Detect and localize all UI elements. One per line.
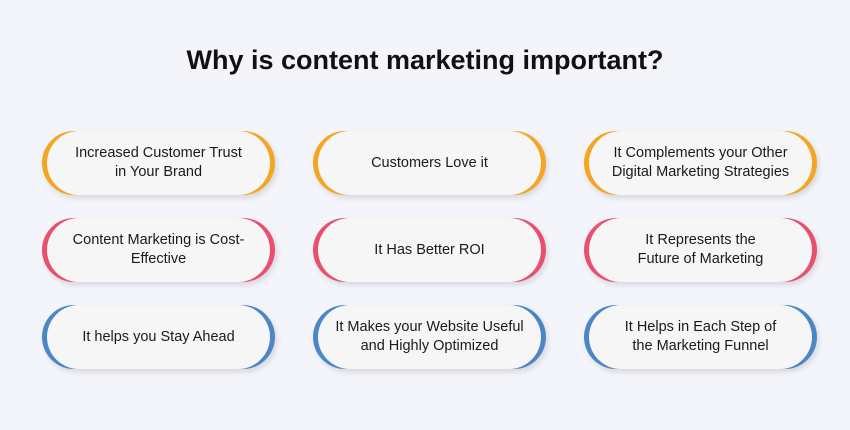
- pill: roi: It Has Better ROI: [374, 242, 485, 258]
- pill: love: [313, 131, 546, 195]
- pill: trust: [42, 131, 275, 195]
- pill: roi: [313, 218, 546, 282]
- pill: future: [584, 218, 817, 282]
- pill: cost: Effective: [131, 251, 186, 267]
- pill: website: It Makes your Website Useful: [335, 319, 524, 335]
- pill: love: Customers Love it: [371, 154, 488, 170]
- pill: future: It Represents the: [645, 232, 756, 248]
- pill: website: and Highly Optimized: [361, 338, 498, 354]
- pill: trust: in Your Brand: [115, 164, 202, 180]
- pill: cost: Content Marketing is Cost-: [73, 232, 244, 248]
- title: Why is content marketing important?: [186, 45, 664, 75]
- pill: cost: [42, 218, 275, 282]
- pill: complements: Digital Marketing Strategies: [612, 164, 789, 180]
- pill: ahead: [42, 305, 275, 369]
- pill: funnel: the Marketing Funnel: [632, 338, 769, 354]
- pill: funnel: [584, 305, 817, 369]
- pill: website: [313, 305, 546, 369]
- pill: future: Future of Marketing: [638, 251, 763, 267]
- pill: complements: [584, 131, 817, 195]
- pill: ahead: It helps you Stay Ahead: [82, 328, 235, 344]
- pill: complements: It Complements your Other: [613, 145, 788, 161]
- pill: funnel: It Helps in Each Step of: [625, 319, 776, 335]
- pill: trust: Increased Customer Trust: [75, 145, 242, 161]
